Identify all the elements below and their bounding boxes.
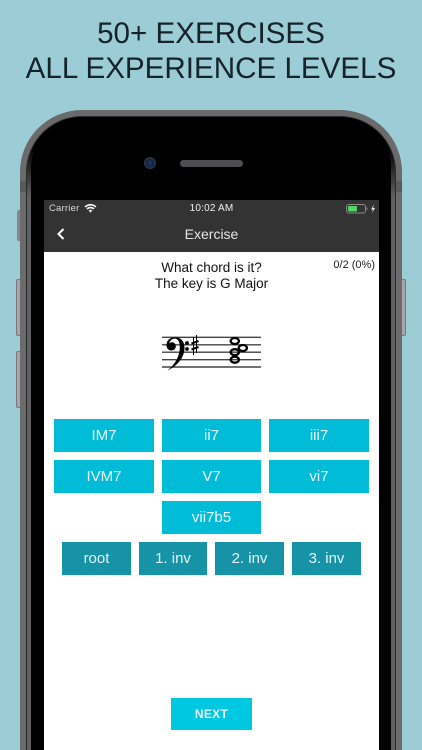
inversion buttons: 1. inv <box>155 550 191 567</box>
next button <box>171 698 252 730</box>
chord buttons: iii7 <box>310 427 328 444</box>
inversion buttons <box>62 542 361 575</box>
icon: sharp <box>192 335 198 355</box>
phone body <box>20 110 402 750</box>
question text <box>155 260 268 291</box>
chord buttons <box>54 419 369 534</box>
inversion buttons: 3. inv <box>309 550 344 567</box>
camera <box>144 157 156 169</box>
question text: What chord is it? <box>161 260 262 275</box>
chord buttons: IM7 <box>91 427 116 444</box>
icon: wifi <box>84 204 96 213</box>
inversion buttons: 2. inv <box>232 550 267 567</box>
chord buttons: vii7b5 <box>192 509 231 526</box>
speaker <box>180 160 243 167</box>
title: 50+ EXERCISES <box>97 17 325 50</box>
next button: NEXT <box>195 707 228 721</box>
chord buttons: IVM7 <box>86 468 122 485</box>
status bar: Carrier <box>49 203 79 214</box>
nav title: Exercise <box>185 226 238 242</box>
question text: The key is G Major <box>155 276 268 291</box>
chord notes <box>231 338 247 363</box>
status bar: 10:02 AM <box>190 203 233 214</box>
status bar <box>49 203 375 214</box>
score: 0/2 (0%) <box>333 259 375 271</box>
chord buttons: ii7 <box>204 427 219 444</box>
music notation <box>162 335 261 370</box>
icon: back chevron <box>57 228 64 240</box>
chord buttons: V7 <box>202 468 221 485</box>
inversion buttons: root <box>84 550 109 567</box>
navigation bar <box>44 200 379 252</box>
icon: bass clef <box>166 337 189 370</box>
title: ALL EXPERIENCE LEVELS <box>26 52 396 85</box>
title <box>26 17 396 85</box>
chord buttons: vi7 <box>309 468 329 485</box>
screen <box>44 200 379 750</box>
side buttons <box>16 210 406 408</box>
icon: battery <box>346 204 375 214</box>
